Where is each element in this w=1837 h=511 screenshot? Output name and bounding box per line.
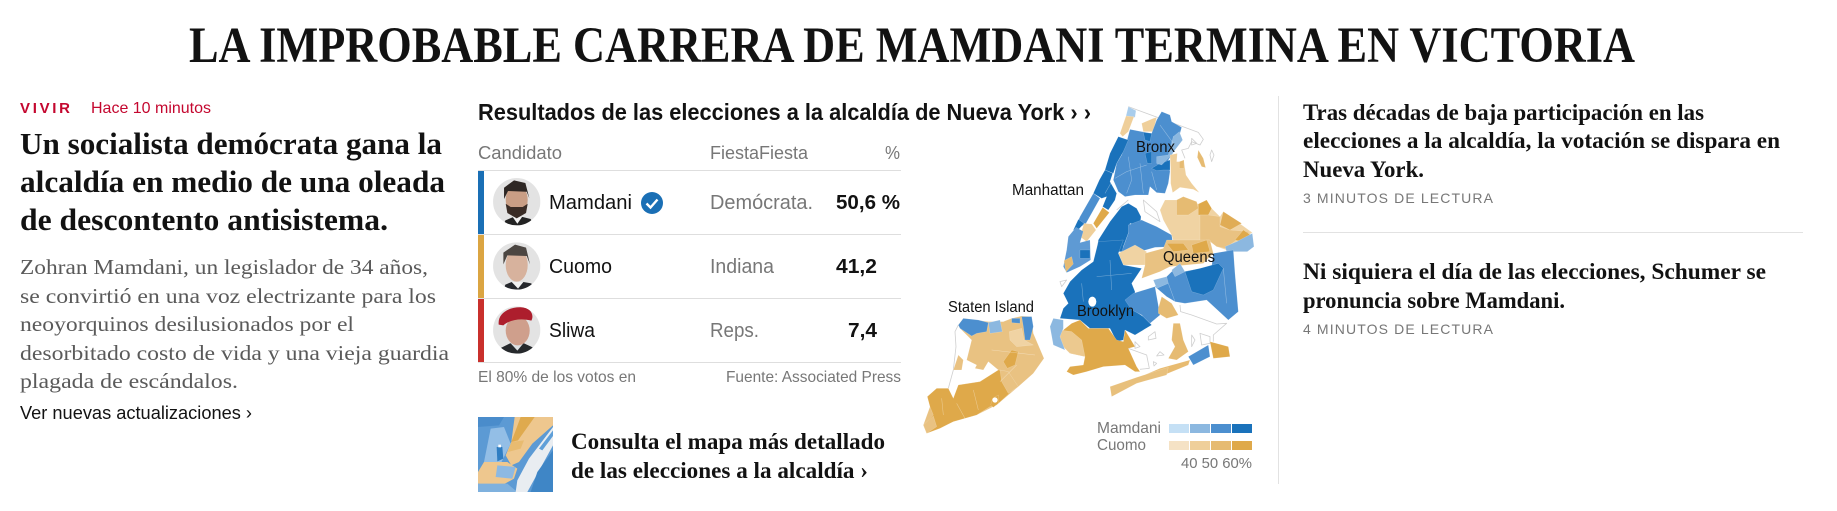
story 1 headline: Tras décadas de baja participación en las: [1303, 100, 1704, 125]
choropleth map of NYC: [923, 107, 1254, 433]
panel: detailed map link: [478, 417, 885, 492]
region: lower Manhattan: [1063, 227, 1091, 273]
story 1 headline: Nueva York.: [1303, 157, 1424, 182]
label: Manhattan: Manhattan: [1012, 182, 1084, 199]
legend label: Cuomo: Cuomo: [1097, 437, 1146, 454]
story 1 read time: 3 MINUTOS DE LECTURA: [1303, 190, 1494, 206]
map link text: de las elecciones a la alcaldía ›: [571, 458, 868, 484]
table header: Candidato: [478, 143, 562, 163]
label: Staten Island: Staten Island: [948, 299, 1034, 316]
story 2 read time: 4 MINUTOS DE LECTURA: [1303, 321, 1494, 337]
party: Demócrata.: [710, 192, 813, 214]
party: Indiana: [710, 256, 775, 278]
timestamp: Hace 10 minutos: [91, 100, 211, 117]
label: Bronx: Bronx: [1136, 139, 1175, 156]
lead summary: Zohran Mamdani, un legislador de 34 años,: [20, 255, 428, 279]
region: Queens and Brooklyn: [1060, 240, 1238, 380]
label: Brooklyn: Brooklyn: [1077, 303, 1134, 320]
map link text: [571, 429, 885, 484]
story 2 headline: Ni siquiera el día de las elecciones, Schumer se: [1303, 259, 1766, 284]
results heading: Resultados de las elecciones a la alcaldía de Nueva York › ›: [478, 99, 1091, 125]
share: 50,6 %: [836, 192, 900, 214]
table header: FiestaFiesta: [710, 143, 809, 163]
portrait: Cuomo: [493, 242, 540, 290]
region: Staten Island: [923, 316, 1044, 433]
legend swatches: Cuomo: [1169, 441, 1252, 450]
table header: [478, 143, 900, 163]
lead headline: [20, 126, 445, 237]
share: 7,4: [848, 320, 878, 342]
share: 41,2: [836, 256, 877, 278]
row: Cuomo: [478, 235, 877, 298]
lead headline: de descontento antisistema.: [20, 202, 388, 237]
lead summary: neoyorquinos desilusionados por el: [20, 312, 354, 336]
row: Mamdani: [478, 171, 900, 234]
icon: winner check: [641, 192, 663, 214]
lead headline: alcaldía en medio de una oleada: [20, 164, 445, 199]
link: updates: Ver nuevas actualizaciones ›: [20, 403, 252, 423]
region: Bronx and Upper Manhattan: [1073, 107, 1254, 252]
story 1 headline: [1303, 100, 1780, 182]
lead summary: se convirtió en una voz electrizante para los: [20, 284, 436, 308]
lead summary: plagada de escándalos.: [20, 369, 238, 393]
legend scale: 40 50 60%: [1181, 455, 1252, 472]
table header: %: [885, 143, 900, 163]
lead summary: desorbitado costo de vida y una vieja guardia: [20, 341, 450, 365]
portrait: Mamdani: [493, 178, 540, 225]
title: LA IMPROBABLE CARRERA DE MAMDANI TERMINA EN VICTORIA: [189, 18, 1635, 74]
story 1 headline: elecciones a la alcaldía, la votación se dispara en: [1303, 128, 1780, 153]
story 2 headline: [1303, 259, 1766, 313]
kicker: VIVIR: VIVIR: [20, 100, 70, 117]
map legend: [1097, 420, 1252, 472]
lead headline: Un socialista demócrata gana la: [20, 126, 442, 161]
panel: side stories: [1303, 100, 1803, 337]
party: Reps.: [710, 320, 759, 342]
portrait: Sliwa: [493, 306, 540, 354]
name: Sliwa: [549, 320, 596, 342]
legend label: Mamdani: Mamdani: [1097, 420, 1161, 437]
source: Fuente: Associated Press: [726, 369, 901, 386]
name: Mamdani: [549, 192, 632, 214]
region: south Brooklyn edge: [1050, 318, 1168, 397]
story 2 headline: pronuncia sobre Mamdani.: [1303, 288, 1565, 313]
table footnote: El 80% de los votos en: [478, 369, 636, 386]
name: Cuomo: [549, 256, 612, 278]
map link text: Consulta el mapa más detallado: [571, 429, 885, 455]
lead summary: [20, 255, 450, 393]
panel: results table: [478, 99, 1091, 386]
map thumbnail: [478, 417, 553, 492]
row: Sliwa: [478, 299, 878, 362]
label: Queens: Queens: [1163, 249, 1215, 266]
legend swatches: Mamdani: [1169, 424, 1252, 433]
panel: lead story: [20, 100, 450, 423]
